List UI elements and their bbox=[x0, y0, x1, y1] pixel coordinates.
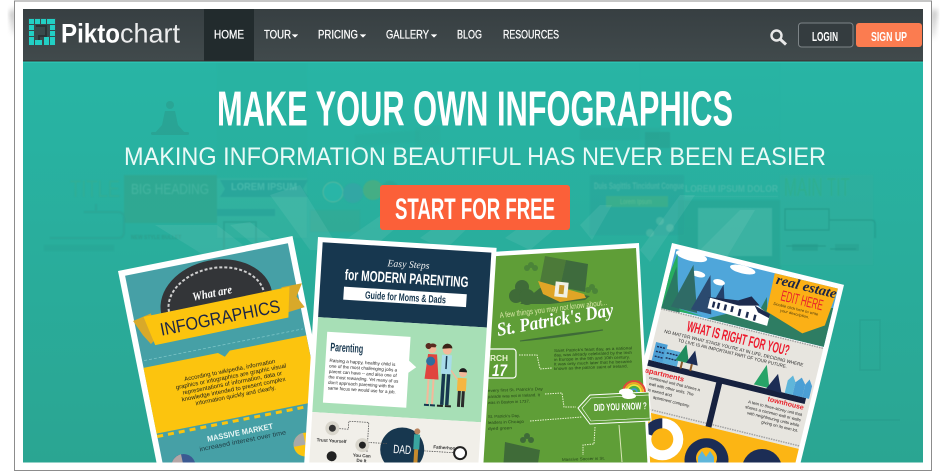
yellow panel: knowledge intended to present complex bbox=[181, 377, 286, 403]
navy header: Guide for Moms & Dads bbox=[365, 289, 446, 306]
active home tab bbox=[204, 9, 254, 60]
nav links: GALLERY bbox=[386, 28, 429, 42]
ghost template collage bbox=[74, 132, 876, 256]
nav links: RESOURCES bbox=[503, 28, 559, 42]
fact text bbox=[488, 345, 633, 462]
logo wordmark bbox=[61, 18, 180, 48]
card: St. Patrick's Day bbox=[484, 243, 652, 462]
yellow panel bbox=[142, 328, 320, 437]
apartments text: apartments bbox=[644, 367, 685, 384]
subtitle: TO LIVE IS AN IMPORTANT PART OF YOUR FUTURE. bbox=[678, 338, 788, 369]
yellow panel: representations of information, data or bbox=[182, 371, 283, 397]
fact text: Saint Patrick's feast day, as a national bbox=[554, 345, 632, 353]
fact text: day, was already celebrated by the Irish bbox=[554, 350, 632, 357]
fact text: known as the patron saint of Ireland. bbox=[554, 363, 628, 371]
gray panel bbox=[636, 308, 823, 450]
meditation figure bbox=[151, 101, 189, 135]
March 17 box: 17 bbox=[492, 361, 508, 380]
fact text: It was only much later that he became bbox=[554, 359, 633, 366]
townhouse text: shares a common wall or walls bbox=[745, 404, 801, 422]
fact text: parade was not in Ireland. It bbox=[488, 392, 541, 399]
speech bubble: the most rewarding. Yet many of us bbox=[328, 374, 399, 384]
Massive market heading: MASSIVE MARKET bbox=[206, 422, 274, 444]
diagonal light rays bbox=[155, 185, 755, 262]
yellow panel: graphics or infographics are graphic visual bbox=[176, 363, 287, 391]
speech bubble: same focus we would use for a job. bbox=[328, 385, 396, 395]
nav links: PRICING bbox=[318, 28, 358, 42]
nav links: TOUR bbox=[264, 28, 291, 42]
fact text: St. Patrick's Day, bbox=[488, 413, 520, 419]
ghost template collage: LOREM IPSUM DOLOR bbox=[685, 184, 779, 195]
logo wordmark: chart bbox=[120, 18, 180, 48]
rainbow bbox=[619, 381, 645, 399]
Massive market heading: increased interest over time bbox=[199, 429, 287, 453]
card: What are Infographics bbox=[118, 236, 339, 470]
St Patrick's heading: A few things you may not know about... bbox=[499, 298, 607, 320]
Did you know banner bbox=[578, 392, 651, 424]
apartments text: wall with other units. The bbox=[648, 381, 695, 397]
navy header bbox=[318, 242, 491, 327]
yellow panel with donuts bbox=[648, 412, 799, 462]
Massive market heading bbox=[200, 423, 286, 452]
ribbon banner: INFOGRAPHICS bbox=[158, 296, 282, 340]
townhouse text: A twin to three-storey unit that bbox=[748, 399, 803, 417]
speech bubble: one of the most challenging jobs a bbox=[329, 363, 398, 373]
ghost template collage: MAIN TIT bbox=[784, 172, 850, 202]
bottom hat bbox=[504, 433, 540, 462]
landscape scene bbox=[661, 247, 838, 348]
apartments text: numbered unit that shares a bbox=[649, 375, 701, 392]
hat and clovers bbox=[509, 256, 598, 305]
pie charts bbox=[172, 433, 318, 470]
yellow tag: Double click here to write bbox=[773, 302, 819, 317]
buildings and trees bbox=[652, 342, 812, 399]
dad diagram: Time & bbox=[452, 463, 468, 469]
card: Modern Parenting bbox=[304, 237, 497, 472]
login button bbox=[798, 23, 853, 47]
dad diagram: DAD bbox=[393, 442, 412, 457]
fact text: every first St. Patrick's Day bbox=[488, 386, 543, 393]
login button: LOGIN bbox=[812, 29, 838, 44]
dad diagram: Trust Yourself bbox=[317, 437, 347, 444]
logo icon bbox=[28, 18, 56, 46]
sign up button bbox=[856, 23, 922, 47]
apartments text bbox=[646, 369, 700, 408]
lower section bbox=[309, 412, 481, 462]
yellow panel: information quickly and clearly. bbox=[195, 385, 277, 407]
logo wordmark: Pikto bbox=[61, 18, 120, 48]
ghost template collage: LOREM IPSUM bbox=[231, 182, 297, 193]
dad diagram: You Can bbox=[353, 453, 371, 459]
navy header: Easy Steps bbox=[386, 258, 430, 272]
townhouse text bbox=[745, 396, 804, 432]
nav links bbox=[214, 28, 559, 42]
yellow tag: EDIT HERE bbox=[779, 288, 825, 314]
family illustration bbox=[422, 342, 469, 408]
fact text: leaders in Chicago bbox=[488, 419, 525, 425]
dad diagram: Fatherhood bbox=[433, 444, 459, 451]
search icon bbox=[772, 30, 786, 44]
yellow tag: your description. bbox=[780, 309, 810, 320]
What are label: What are bbox=[191, 282, 234, 304]
navigation bar bbox=[23, 9, 923, 62]
nav links: BLOG bbox=[457, 28, 482, 42]
dark arch bbox=[160, 259, 272, 314]
fact text: Massive Soccer is St. bbox=[562, 456, 605, 462]
ghost template collage: Duis Sagittis Tincidunt Congue bbox=[594, 181, 684, 191]
yellow tag bbox=[766, 273, 838, 334]
sign up button: SIGN UP bbox=[871, 29, 907, 44]
title: WHAT IS RIGHT FOR YOU? bbox=[685, 318, 791, 360]
ribbon banner bbox=[132, 283, 308, 348]
apartments text: apartment company. bbox=[653, 394, 691, 408]
subtitle: NO MATTER WHAT STAGE YOU'RE AT IN LIFE, DECIDING WHERE bbox=[664, 329, 804, 368]
apartments text: is owned and bbox=[647, 387, 673, 398]
March 17 box bbox=[488, 348, 517, 379]
navy header: for MODERN PARENTING bbox=[344, 267, 469, 291]
yellow panel: According to wikipedia, information bbox=[184, 359, 276, 383]
dad diagram bbox=[316, 420, 468, 462]
fact text: was in Boston in 1737. bbox=[488, 399, 530, 405]
St Patrick's heading: St. Patrick's Day bbox=[495, 300, 616, 341]
faint bottom right ghost bbox=[840, 320, 900, 420]
green section bbox=[312, 317, 487, 422]
dad diagram: Do It bbox=[356, 458, 367, 463]
card: Real estate bbox=[617, 243, 844, 470]
yellow tag: real estate bbox=[774, 273, 838, 302]
ghost template collage: TITLE bbox=[70, 176, 120, 203]
Did you know banner: DID YOU KNOW ? bbox=[594, 401, 647, 414]
call to action button: START FOR FREE bbox=[395, 193, 555, 226]
speech bubble: Parenting bbox=[330, 340, 364, 356]
ghost template collage: NEW STYLE BULLET bbox=[131, 235, 181, 241]
speech bubble: parent can have -- and also one of bbox=[329, 369, 398, 378]
speech bubble: Raising a happy, healthy child is bbox=[329, 358, 396, 367]
townhouse text: townhouse bbox=[767, 396, 804, 412]
March 17 box: RCH bbox=[490, 354, 508, 363]
townhouse text: giving on its own lot. bbox=[761, 419, 799, 433]
townhouse text: with neighbouring units while bbox=[747, 410, 801, 428]
ghost template collage: BIG HEADING bbox=[131, 181, 209, 198]
dotted connectors bbox=[519, 355, 595, 455]
ghost template collage: Lorem Ipsum bbox=[620, 199, 652, 206]
call to action button bbox=[380, 185, 570, 230]
fact text: in Europe in the 9th and 10th century. bbox=[554, 354, 630, 362]
fact text: dyed green bbox=[488, 425, 512, 431]
subheadline: MAKING INFORMATION BEAUTIFUL HAS NEVER BEEN EASIER bbox=[124, 143, 826, 171]
nav links: HOME bbox=[214, 28, 244, 42]
speech bubble: don't approach parenting with the bbox=[328, 380, 395, 389]
speech bubble bbox=[323, 332, 418, 408]
